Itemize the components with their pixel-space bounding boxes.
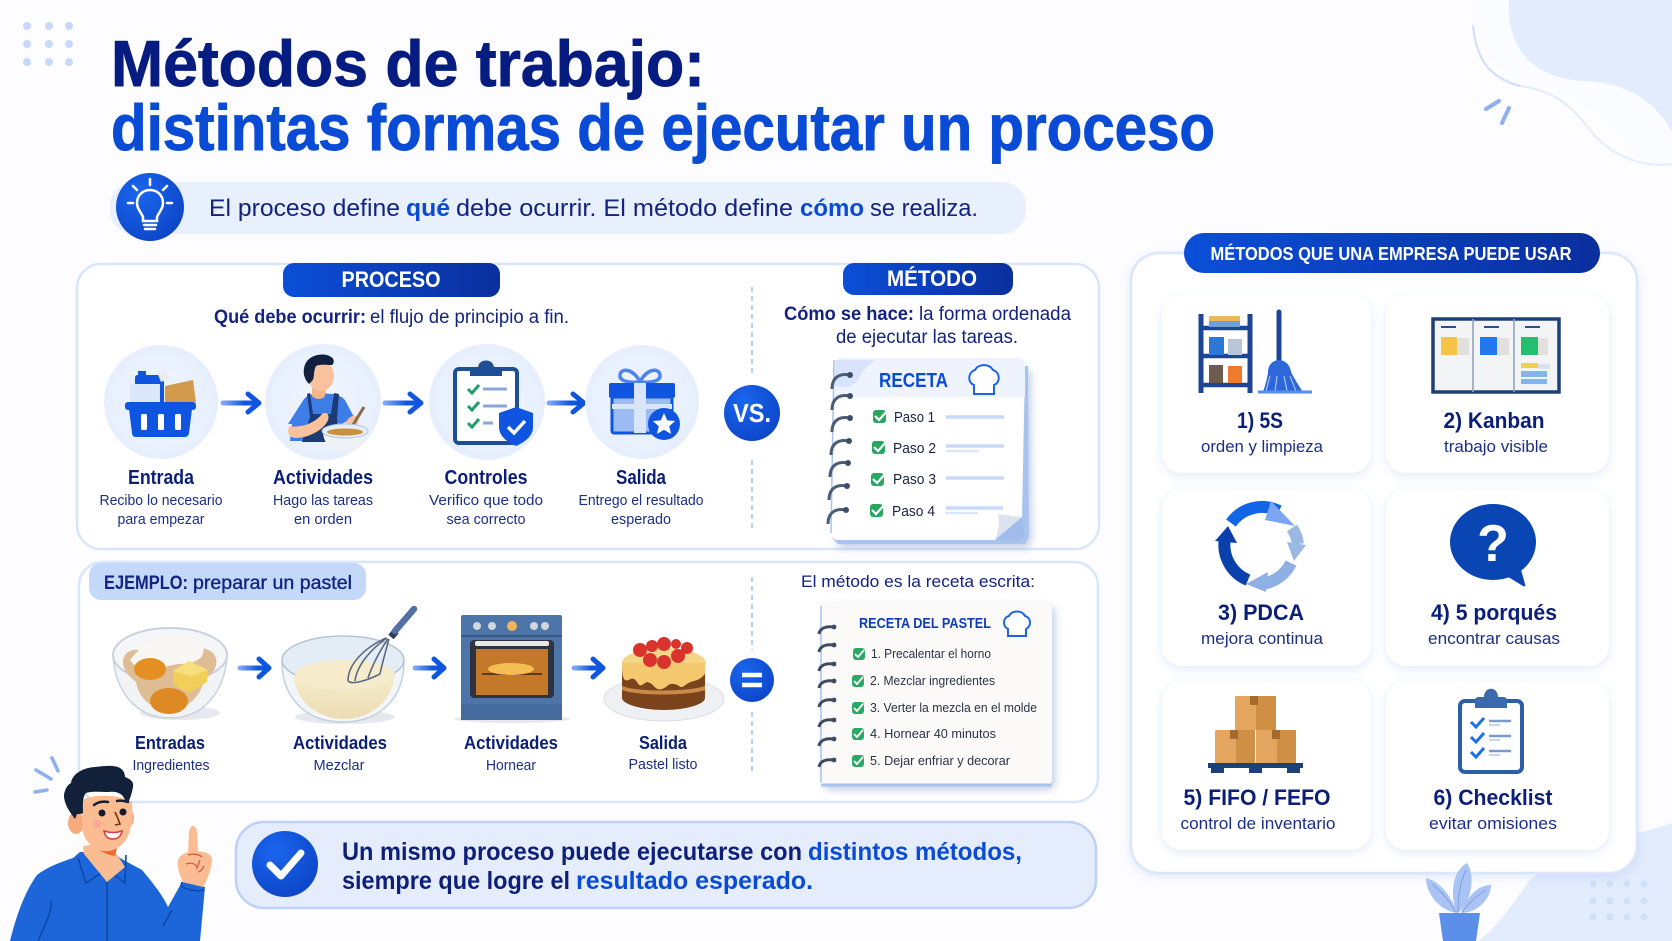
card: 5S — [1162, 295, 1371, 473]
card: 5S: 1) 5S — [1237, 408, 1283, 433]
card: 5 porques: encontrar causas — [1428, 629, 1560, 648]
metodo subtitle: Cómo se hace: — [784, 304, 914, 325]
hand — [178, 826, 212, 887]
panel: metodos empresa — [1131, 233, 1637, 873]
example labels: Mezclar — [314, 757, 364, 774]
step: Actividades: Actividades — [273, 467, 373, 489]
title: Métodos de trabajo: — [111, 27, 705, 100]
banner text: El proceso define — [209, 195, 400, 222]
metodo caption: El método es la receta escrita: — [801, 572, 1035, 591]
banner text: qué — [406, 195, 450, 222]
arrow — [223, 394, 259, 412]
step: Actividades: Hago las tareas — [273, 492, 373, 509]
callout text: resultado esperado. — [576, 867, 813, 895]
equals badge — [730, 658, 774, 702]
card: 5 porques: 4) 5 porqués — [1431, 600, 1557, 625]
example labels: Pastel listo — [628, 756, 698, 773]
example labels — [132, 733, 698, 774]
callout text — [342, 838, 1022, 895]
card: Kanban: trabajo visible — [1444, 437, 1548, 456]
step: Controles: Controles — [444, 467, 528, 489]
checklist steps: Paso 3 — [893, 471, 936, 488]
card: PDCA: mejora continua — [1201, 629, 1324, 648]
step: Salida — [578, 345, 704, 528]
example labels: Ingredientes — [132, 757, 210, 774]
step: Entrada — [100, 345, 222, 528]
icon: cycle arrows — [1215, 501, 1306, 592]
checklist steps: Paso 4 — [892, 503, 935, 520]
banner text: debe ocurrir. El método define — [456, 195, 793, 222]
card: 5 porques — [1386, 489, 1609, 666]
character: pointing man — [10, 758, 212, 941]
recipe steps: 4. Hornear 40 minutos — [870, 726, 996, 741]
recipe steps: 3. Verter la mezcla en el molde — [870, 700, 1037, 715]
arrow — [240, 659, 269, 677]
example labels: Hornear — [486, 757, 536, 774]
methods pill — [1184, 233, 1600, 273]
metodo subtitle — [784, 304, 1071, 348]
card: Kanban — [1386, 295, 1609, 473]
proceso subtitle: el flujo de principio a fin. — [370, 307, 569, 328]
callout text: siempre que logre el — [342, 867, 570, 895]
arrow — [549, 394, 584, 412]
banner text: cómo — [800, 195, 864, 222]
recipe steps: 5. Dejar enfriar y decorar — [870, 753, 1011, 768]
icon: question bubble: ? — [1477, 515, 1509, 573]
card: Kanban: 2) Kanban — [1444, 408, 1544, 433]
arrow — [574, 659, 603, 677]
illustration: oven — [454, 615, 570, 723]
card: FIFO: 5) FIFO / FEFO — [1184, 785, 1330, 810]
card: Checklist — [1386, 681, 1609, 850]
proceso subtitle: Qué debe ocurrir: — [214, 307, 366, 328]
banner text — [209, 195, 978, 222]
subtitle banner — [110, 173, 1026, 241]
panel: ejemplo — [79, 562, 1098, 802]
step: Controles — [429, 344, 545, 528]
card: PDCA — [1162, 489, 1371, 666]
card: PDCA: 3) PDCA — [1218, 600, 1304, 625]
step: Actividades: en orden — [294, 511, 352, 528]
step: Entrada: Entrada — [128, 467, 195, 489]
proceso pill — [283, 263, 500, 297]
card: Checklist: 6) Checklist — [1434, 785, 1553, 810]
panel: proceso y metodo — [77, 263, 1099, 549]
callout text: Un mismo proceso puede ejecutarse con — [342, 838, 802, 866]
step: Entrada: Recibo lo necesario — [100, 492, 222, 509]
recipe steps — [852, 646, 1037, 768]
step: Actividades — [265, 344, 381, 528]
icon: shelf and broom — [1199, 312, 1312, 393]
VS badge — [724, 385, 780, 441]
head — [68, 812, 84, 834]
step: Controles: sea correcto — [446, 511, 526, 528]
recipe steps: 1. Precalentar el horno — [871, 646, 991, 661]
arrow — [415, 659, 444, 677]
banner text: se realiza. — [870, 195, 978, 222]
notebook: receta — [828, 358, 1029, 544]
methods pill: MÉTODOS QUE UNA EMPRESA PUEDE USAR — [1210, 243, 1572, 264]
checklist steps — [870, 409, 1004, 520]
shirt — [10, 852, 205, 941]
icon: question bubble — [1450, 504, 1536, 586]
step: Salida: Salida — [616, 467, 667, 489]
card: Checklist: evitar omisiones — [1429, 814, 1557, 833]
example labels: Actividades — [464, 733, 558, 753]
VS badge: VS. — [733, 398, 771, 428]
notebook: receta del pastel — [819, 602, 1052, 786]
title — [111, 27, 1215, 164]
icon: chef hat — [1004, 612, 1030, 636]
example labels: Salida — [639, 733, 688, 753]
step: Controles: Verifico que todo — [429, 492, 543, 509]
metodo pill — [843, 263, 1013, 295]
notebook: receta del pastel: RECETA DEL PASTEL — [859, 615, 991, 632]
ejemplo pill — [89, 563, 366, 600]
cook figure — [288, 355, 368, 452]
proceso subtitle — [214, 307, 569, 328]
icon: boxes on pallet — [1208, 696, 1303, 773]
ejemplo pill: preparar un pastel — [193, 573, 352, 594]
recipe steps: 2. Mezclar ingredientes — [870, 673, 995, 688]
checklist steps: Paso 2 — [893, 440, 936, 457]
step: Entrada: para empezar — [118, 511, 204, 528]
ejemplo pill: EJEMPLO: — [104, 573, 188, 594]
metodo subtitle: la forma ordenada — [919, 304, 1071, 325]
illustration: mixing bowl and whisk — [282, 609, 414, 724]
illustration: cake — [604, 637, 724, 721]
metodo pill: MÉTODO — [887, 266, 977, 291]
icon: clipboard — [1460, 689, 1522, 772]
icon: check — [252, 831, 318, 897]
card: FIFO: control de inventario — [1180, 814, 1336, 833]
example labels: Entradas — [135, 733, 205, 753]
metodo subtitle: de ejecutar las tareas. — [836, 327, 1018, 348]
callout — [236, 822, 1096, 908]
icon: light bulb — [116, 173, 184, 241]
icon: kanban board — [1433, 319, 1559, 392]
step: Salida: Entrego el resultado — [578, 492, 704, 509]
example labels: Actividades — [293, 733, 387, 753]
notebook: receta: RECETA — [879, 370, 948, 392]
proceso pill: PROCESO — [342, 267, 440, 292]
card: FIFO — [1162, 681, 1371, 850]
checklist steps: Paso 1 — [894, 409, 935, 426]
card: 5S: orden y limpieza — [1201, 437, 1324, 456]
step: Salida: esperado — [611, 511, 671, 528]
neck — [83, 841, 125, 882]
illustration: bowl of ingredients — [113, 628, 227, 720]
callout text: distintos métodos, — [808, 838, 1022, 866]
icon: chef hat — [969, 365, 999, 394]
arrow — [385, 394, 421, 412]
plant — [1426, 863, 1491, 941]
title: distintas formas de ejecutar un proceso — [111, 91, 1215, 164]
